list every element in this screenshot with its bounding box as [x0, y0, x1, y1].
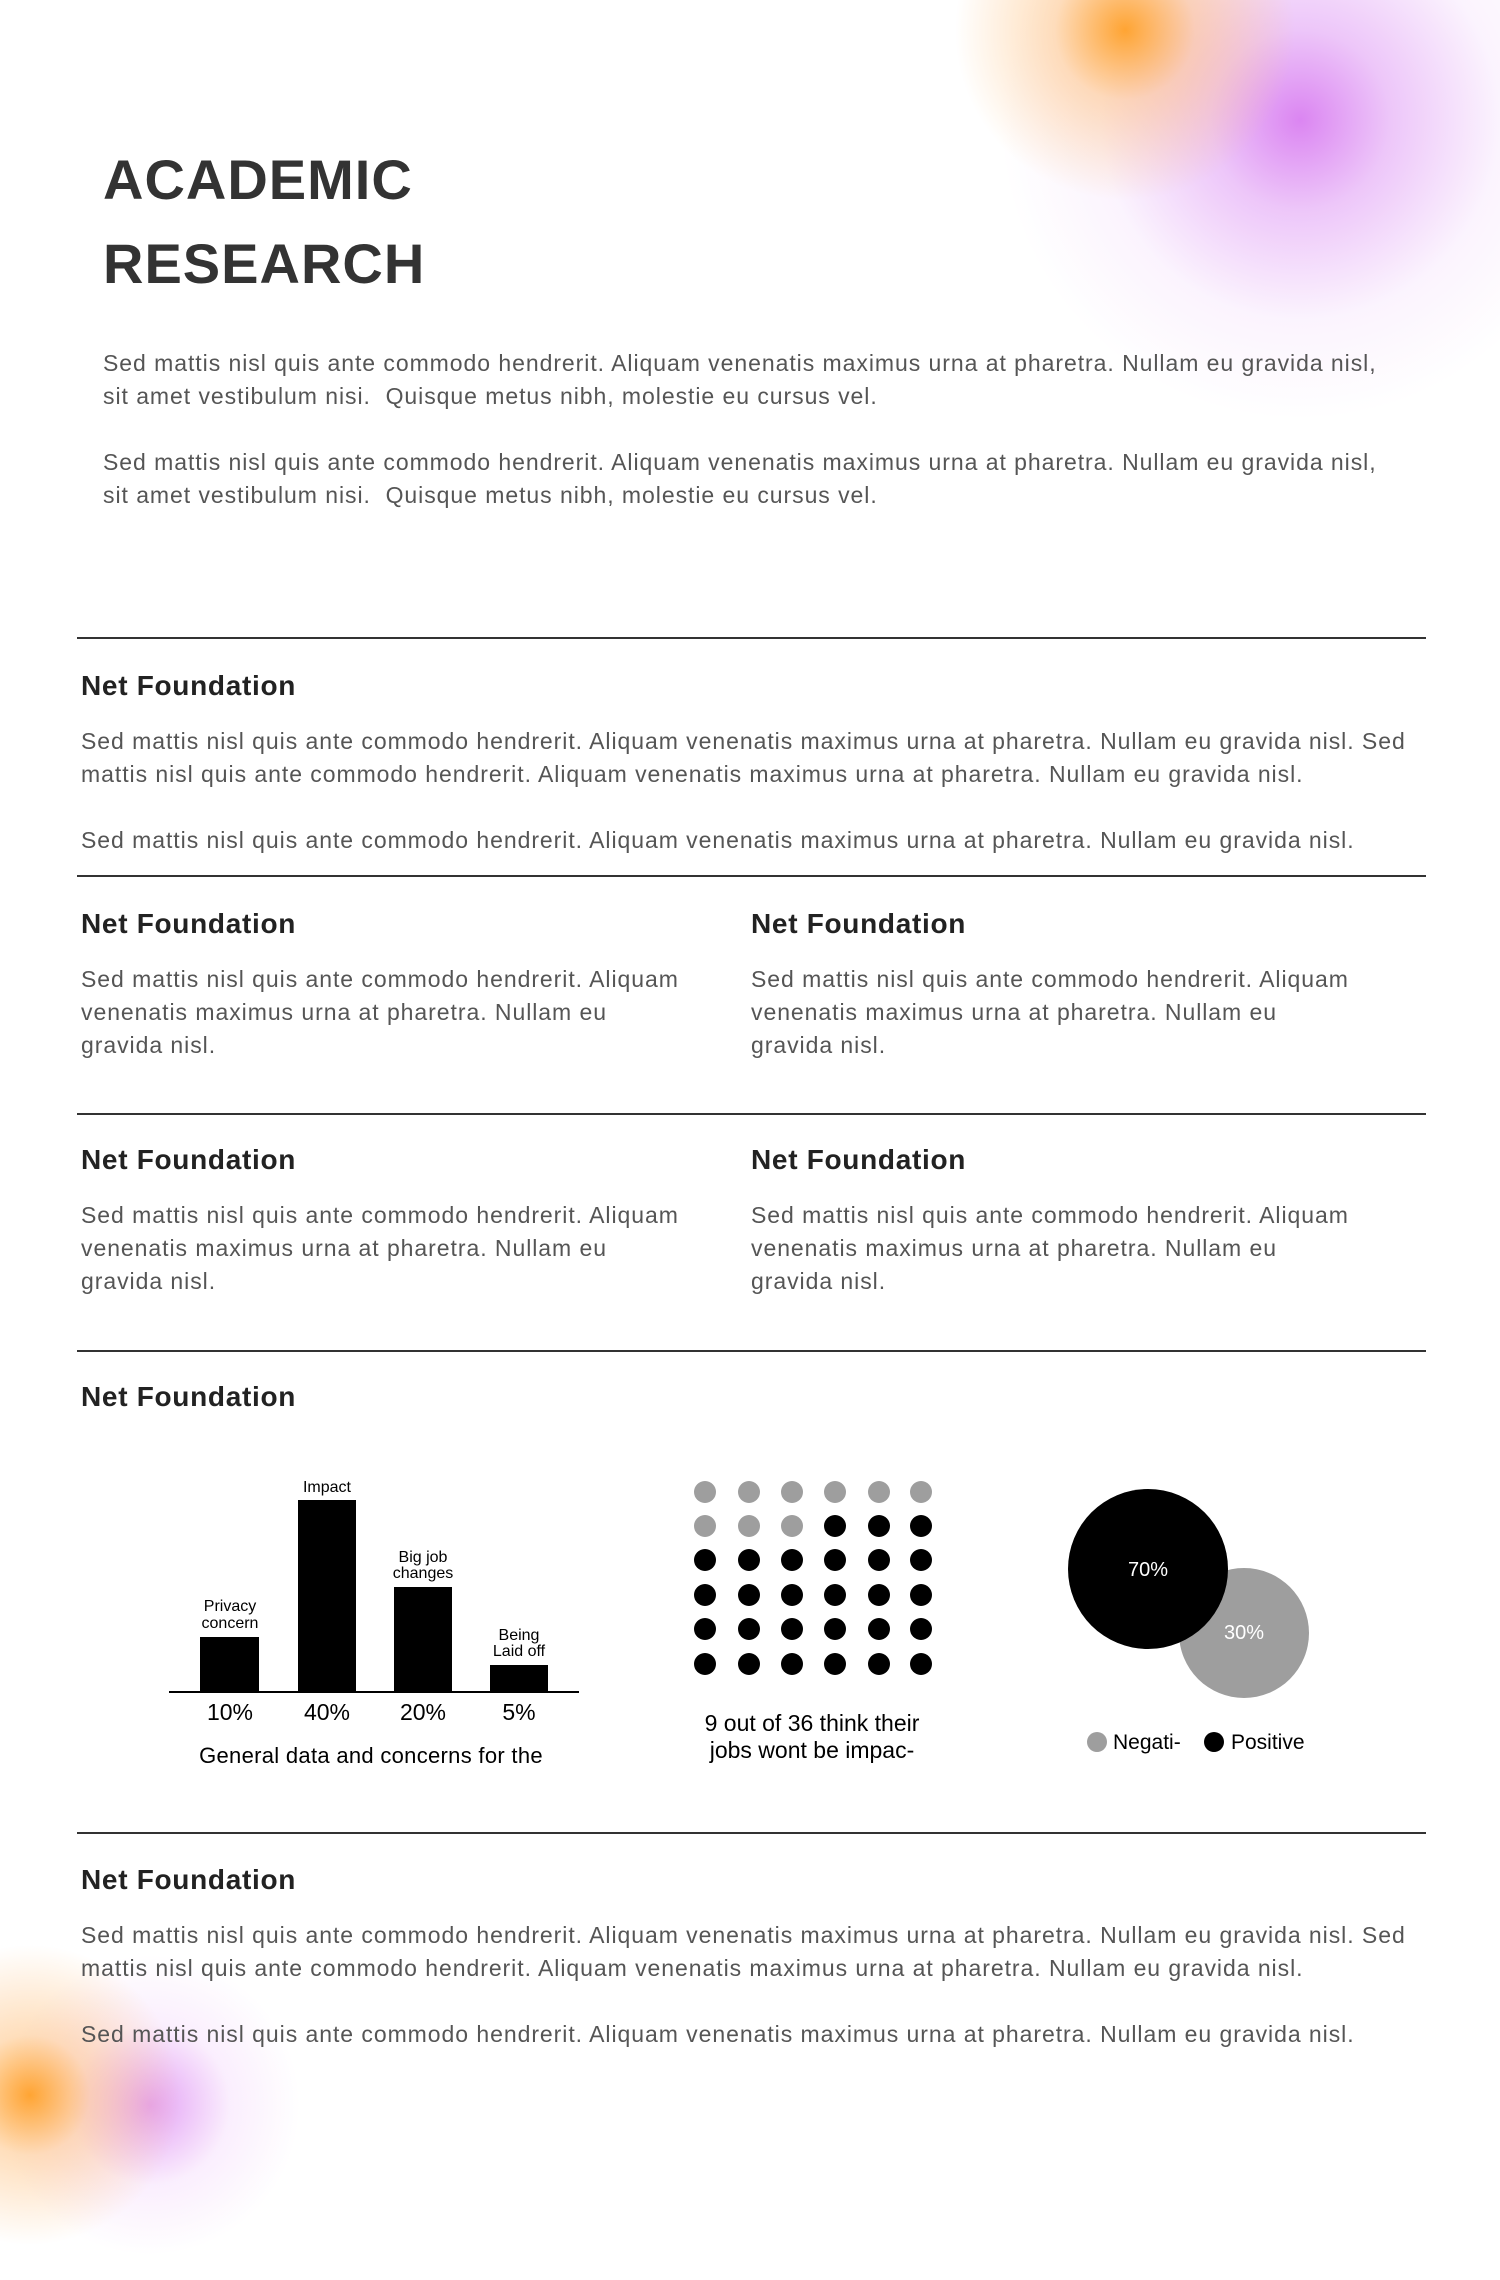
bar chart: Impact	[303, 1479, 352, 1496]
section 2 left: Net Foundation	[81, 908, 296, 939]
text: venenatis maximus urna at pharetra. Nullam eu	[751, 999, 1277, 1025]
text: mattis nisl quis ante commodo hendrerit. Aliquam venenatis maximus urna at pharetra. Nullam eu gravida nisl.	[81, 761, 1303, 787]
text: gravida nisl.	[81, 1268, 216, 1294]
bar chart: 20%	[400, 1699, 446, 1725]
text: Sed mattis nisl quis ante commodo hendrerit. Aliquam	[751, 966, 1349, 992]
bar chart	[169, 1479, 579, 1768]
text: gravida nisl.	[81, 1032, 216, 1058]
dot matrix chart: jobs wont be impac-	[709, 1737, 914, 1763]
section 5: Net Foundation	[81, 1864, 296, 1895]
legend: Positive	[1231, 1731, 1305, 1754]
bar chart: Privacy	[204, 1598, 256, 1615]
text	[81, 966, 679, 1058]
section 1	[81, 670, 1406, 853]
section 3 left	[81, 1144, 679, 1294]
text	[81, 1202, 679, 1294]
section 3 right: Net Foundation	[751, 1144, 966, 1175]
title: RESEARCH	[103, 232, 425, 295]
intro paragraph 2: sit amet vestibulum nisi. Quisque metus nibh, molestie eu cursus vel.	[103, 482, 878, 508]
intro paragraph 2	[103, 449, 1377, 508]
bar chart: Being	[499, 1627, 539, 1644]
legend	[1087, 1731, 1305, 1754]
bar chart: 10%	[207, 1699, 253, 1725]
section 3 left: Net Foundation	[81, 1144, 296, 1175]
text: venenatis maximus urna at pharetra. Nullam eu	[81, 1235, 607, 1261]
bar chart: Big job	[399, 1549, 448, 1566]
intro paragraph 2: Sed mattis nisl quis ante commodo hendrerit. Aliquam venenatis maximus urna at pharetra. Nullam eu gravida nisl,	[103, 449, 1377, 475]
bubble chart: 70%	[1128, 1559, 1168, 1581]
text: venenatis maximus urna at pharetra. Nullam eu	[751, 1235, 1277, 1261]
section 4 heading: Net Foundation	[81, 1381, 296, 1412]
text: venenatis maximus urna at pharetra. Nullam eu	[81, 999, 607, 1025]
text: Sed mattis nisl quis ante commodo hendrerit. Aliquam	[81, 1202, 679, 1228]
decorative gradient bottom left	[0, 1880, 400, 2280]
text: mattis nisl quis ante commodo hendrerit. Aliquam venenatis maximus urna at pharetra. Nullam eu gravida nisl.	[81, 1955, 1303, 1981]
intro paragraph 1	[103, 350, 1377, 409]
dot matrix chart	[694, 1481, 932, 1763]
bar chart: concern	[202, 1615, 258, 1632]
intro paragraph 1: Sed mattis nisl quis ante commodo hendrerit. Aliquam venenatis maximus urna at pharetra. Nullam eu gravida nisl,	[103, 350, 1377, 376]
text	[751, 1202, 1349, 1294]
section 2 right	[751, 908, 1349, 1058]
dot matrix chart: 9 out of 36 think their	[705, 1710, 920, 1736]
section 2 left	[81, 908, 679, 1058]
text: Sed mattis nisl quis ante commodo hendrerit. Aliquam venenatis maximus urna at pharetra. Nullam eu gravida nisl. Sed	[81, 728, 1406, 754]
decorative gradient top right	[850, 0, 1500, 500]
bar chart: General data and concerns for the	[199, 1743, 543, 1768]
bar chart: Laid off	[493, 1643, 546, 1660]
heading: Net Foundation	[81, 670, 296, 701]
legend: Negati-	[1113, 1731, 1181, 1754]
text: Sed mattis nisl quis ante commodo hendrerit. Aliquam	[81, 966, 679, 992]
section 3 right	[751, 1144, 1349, 1294]
title: ACADEMIC	[103, 148, 413, 211]
text: Sed mattis nisl quis ante commodo hendrerit. Aliquam venenatis maximus urna at pharetra. Nullam eu gravida nisl.	[81, 2021, 1355, 2047]
title	[103, 148, 425, 295]
text	[81, 728, 1406, 787]
text: gravida nisl.	[751, 1268, 886, 1294]
intro paragraph 1: sit amet vestibulum nisi. Quisque metus nibh, molestie eu cursus vel.	[103, 383, 878, 409]
bar chart: 5%	[502, 1699, 536, 1725]
bar chart: 40%	[304, 1699, 350, 1725]
text: gravida nisl.	[751, 1032, 886, 1058]
bubble chart	[1068, 1489, 1309, 1754]
text: Sed mattis nisl quis ante commodo hendrerit. Aliquam	[751, 1202, 1349, 1228]
bar chart: changes	[393, 1565, 453, 1582]
section 5	[81, 1864, 1406, 2047]
text: Sed mattis nisl quis ante commodo hendrerit. Aliquam venenatis maximus urna at pharetra. Nullam eu gravida nisl.	[81, 827, 1355, 853]
text	[751, 966, 1349, 1058]
section 2 right: Net Foundation	[751, 908, 966, 939]
text	[81, 1922, 1406, 1981]
text: Sed mattis nisl quis ante commodo hendrerit. Aliquam venenatis maximus urna at pharetra. Nullam eu gravida nisl. Sed	[81, 1922, 1406, 1948]
bubble chart: 30%	[1224, 1622, 1264, 1644]
